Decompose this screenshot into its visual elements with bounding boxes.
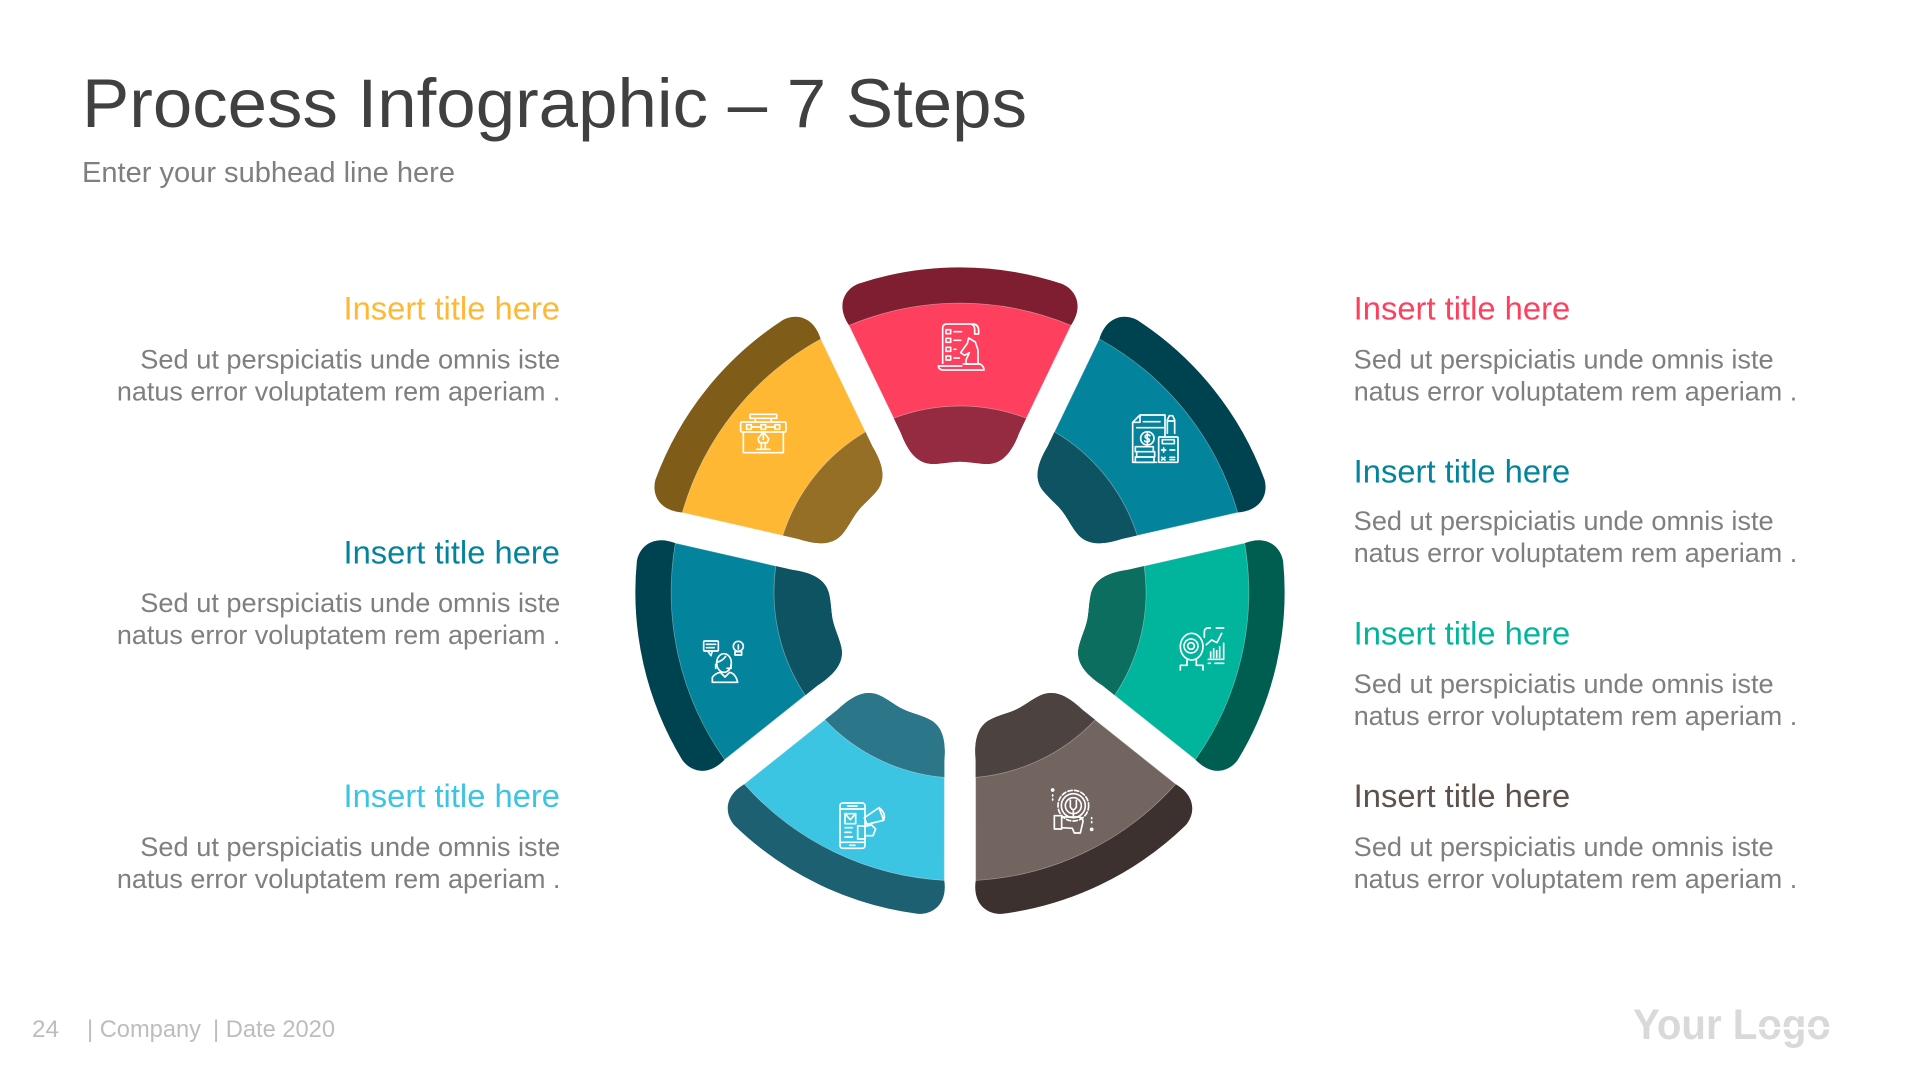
right text block: green step: Insert title here: [1354, 615, 1570, 651]
segment 7: yellow: [633, 298, 933, 604]
left text block: teal step: Sed ut perspiciatis unde omnis iste: [140, 588, 560, 618]
footer: | Company: [87, 1016, 201, 1043]
left text block: teal step: [117, 534, 560, 650]
footer: | Date 2020: [213, 1016, 335, 1043]
right text block: red step: Sed ut perspiciatis unde omnis iste: [1354, 344, 1774, 374]
left text block: teal step: Insert title here: [344, 534, 560, 570]
footer: 24: [32, 1016, 59, 1043]
right text block: brown step: natus error voluptatem rem aperiam .: [1354, 864, 1797, 894]
right text block: teal step: natus error voluptatem rem aperiam .: [1354, 538, 1797, 568]
right text block: red step: [1354, 290, 1797, 406]
icon: gear, wrench and hand: [1052, 789, 1093, 833]
icon: person with speech bubble and bulb: [704, 641, 743, 682]
segment 1: red: [842, 267, 1078, 464]
process wheel: [617, 267, 1303, 936]
right text block: green step: natus error voluptatem rem aperiam .: [1354, 701, 1797, 731]
icon: head with gear and chart: [1180, 628, 1224, 670]
left text block: yellow step: Insert title here: [344, 290, 560, 326]
icon: checklist and chess knight: [938, 324, 984, 370]
left text block: blue step: Sed ut perspiciatis unde omnis iste: [140, 832, 560, 862]
segment 3: green: [1059, 506, 1303, 779]
left text block: blue step: [117, 778, 560, 894]
right text block: brown step: Sed ut perspiciatis unde omnis iste: [1354, 832, 1774, 862]
right text block: green step: [1354, 615, 1797, 731]
segment 5: light blue: [713, 656, 1010, 936]
left text block: blue step: Insert title here: [344, 778, 560, 814]
left text block: yellow step: natus error voluptatem rem aperiam .: [117, 376, 560, 406]
icon: phone with megaphone: [840, 803, 884, 848]
icon: design toolbox with pen nib: [741, 414, 786, 453]
title: Process Infographic – 7 Steps: [82, 65, 1027, 142]
right text block: brown step: Insert title here: [1354, 778, 1570, 814]
left text block: teal step: natus error voluptatem rem aperiam .: [117, 620, 560, 650]
segment 2: dark teal: [987, 298, 1287, 604]
segment 4: brown: [910, 656, 1207, 936]
right text block: red step: natus error voluptatem rem aperiam .: [1354, 376, 1797, 406]
logo: Your Logo: [1633, 1001, 1831, 1049]
right text block: brown step: [1354, 778, 1797, 894]
subtitle: Enter your subhead line here: [82, 157, 455, 189]
left text block: blue step: natus error voluptatem rem aperiam .: [117, 864, 560, 894]
right text block: red step: Insert title here: [1354, 290, 1570, 326]
footer: [32, 1016, 335, 1043]
icon: finance documents and calculator: [1133, 415, 1178, 462]
right text block: teal step: Insert title here: [1354, 454, 1570, 490]
left text block: yellow step: Sed ut perspiciatis unde omnis iste: [140, 344, 560, 374]
right text block: green step: Sed ut perspiciatis unde omnis iste: [1354, 669, 1774, 699]
right text block: teal step: Sed ut perspiciatis unde omnis iste: [1354, 506, 1774, 536]
right text block: teal step: [1354, 454, 1797, 568]
segment 6: teal: [617, 506, 861, 779]
left text block: yellow step: [117, 290, 560, 406]
